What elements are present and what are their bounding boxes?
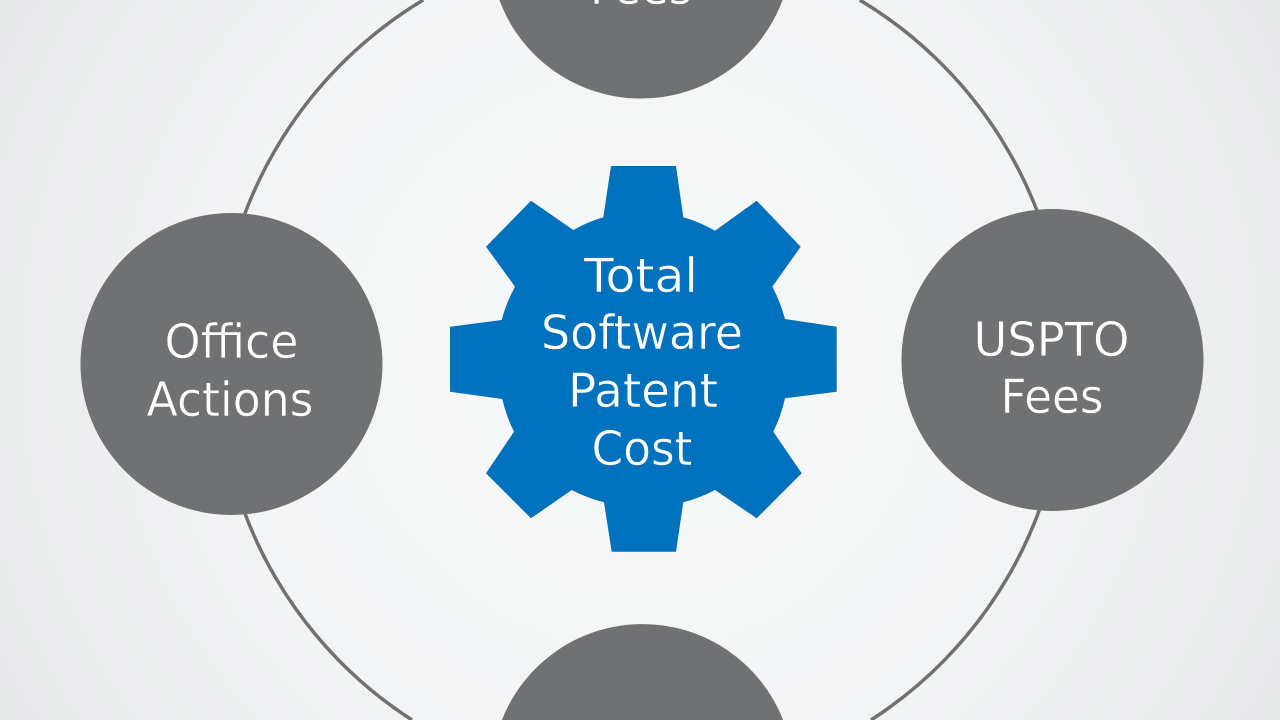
gear: total software patent cost: Patent: [568, 364, 718, 419]
circle: office actions: [80, 213, 382, 515]
circle: bottom: [502, 624, 783, 720]
circle: uspto fees: [902, 209, 1204, 511]
circle: uspto fees: USPTO: [974, 313, 1130, 368]
outer connecting ring: [218, 0, 1065, 720]
circle: top fees: [499, 0, 783, 99]
gear: total software patent cost: [450, 166, 837, 552]
gear: total software patent cost: Software: [541, 306, 743, 361]
circle: uspto fees: Fees: [1000, 370, 1104, 425]
circle: office actions: Actions: [146, 373, 314, 428]
circle: office actions: Office: [164, 315, 298, 370]
gear: total software patent cost: Total: [583, 249, 698, 304]
gear: total software patent cost: Cost: [592, 422, 692, 477]
